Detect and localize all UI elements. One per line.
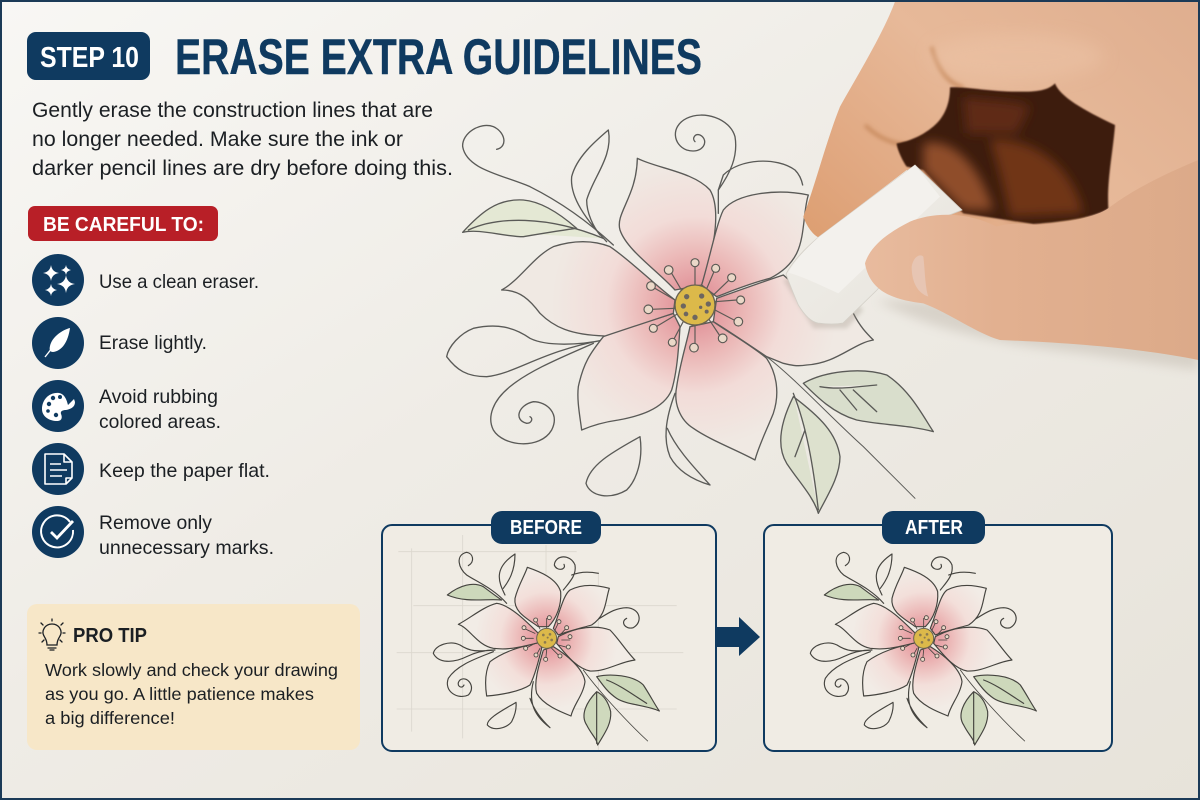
petal right bbox=[713, 275, 873, 366]
petal top bbox=[619, 158, 716, 290]
finger creases bbox=[865, 47, 963, 145]
intro paragraph: Gently erase the construction lines that are bbox=[32, 98, 433, 122]
step badge bbox=[27, 32, 150, 80]
title: ERASE EXTRA GUIDELINES bbox=[175, 29, 702, 85]
after label bbox=[882, 511, 985, 544]
checklist bbox=[32, 254, 274, 559]
flower sketch bbox=[433, 552, 659, 745]
bottom leaf bbox=[666, 393, 710, 485]
flower sketch bbox=[810, 552, 1036, 745]
lower left spiral bbox=[491, 343, 593, 444]
flower centre bbox=[675, 285, 715, 325]
thumb nail bbox=[912, 255, 928, 297]
curled fingers in shadow bbox=[923, 97, 1083, 217]
before label bbox=[491, 511, 601, 544]
eraser bbox=[786, 165, 962, 324]
top leaf bbox=[571, 130, 609, 242]
intro paragraph: darker pencil lines are dry before doing this. bbox=[32, 156, 453, 180]
before panel bbox=[382, 511, 716, 751]
item: avoid colored areas: colored areas. bbox=[99, 411, 221, 433]
item: erase lightly: Erase lightly. bbox=[99, 332, 207, 354]
lower left loop bbox=[447, 326, 603, 377]
be careful badge: BE CAREFUL TO: bbox=[43, 214, 204, 236]
pro tip panel: as you go. A little patience makes bbox=[45, 684, 314, 704]
top right swirl bbox=[675, 115, 736, 190]
right leaf bbox=[803, 371, 933, 432]
item: remove marks bbox=[32, 506, 274, 559]
pro tip panel: Work slowly and check your drawing bbox=[45, 660, 338, 680]
pro tip panel: a big difference! bbox=[45, 708, 175, 728]
step badge: STEP 10 bbox=[40, 42, 139, 74]
eraser shadow bbox=[783, 267, 863, 328]
petal left bbox=[502, 242, 675, 336]
be careful badge bbox=[28, 206, 218, 241]
small upper right petal bbox=[718, 161, 803, 213]
after label: AFTER bbox=[905, 517, 963, 539]
item: clean eraser: Use a clean eraser. bbox=[99, 271, 259, 293]
intro paragraph: no longer needed. Make sure the ink or bbox=[32, 127, 403, 151]
item: avoid colored areas bbox=[32, 380, 221, 433]
eraser top face bbox=[788, 165, 940, 293]
lower right stem bbox=[767, 357, 915, 498]
fingers and back of hand bbox=[803, 2, 1198, 360]
petal bottom left bbox=[578, 313, 680, 430]
upper left spiral stem bbox=[463, 125, 613, 245]
hand shadow on paper bbox=[877, 300, 1198, 370]
icon: light bulb bbox=[39, 619, 65, 650]
item: remove marks: unnecessary marks. bbox=[99, 537, 274, 559]
thumb bbox=[865, 160, 1198, 360]
item: keep paper flat: Keep the paper flat. bbox=[99, 460, 270, 482]
dark gap inside hand bbox=[897, 83, 1115, 224]
pro tip panel: PRO TIP bbox=[73, 625, 147, 647]
item: remove marks: Remove only bbox=[99, 512, 212, 534]
item: clean eraser bbox=[32, 254, 259, 306]
construction guidelines bbox=[397, 535, 683, 750]
petal upper right bbox=[702, 192, 808, 297]
petal bottom right bbox=[676, 322, 777, 460]
intro paragraph bbox=[32, 98, 453, 180]
main flower drawing bbox=[447, 115, 933, 513]
item: keep paper flat bbox=[32, 443, 270, 495]
stamens bbox=[644, 259, 745, 352]
after panel bbox=[764, 511, 1112, 751]
pro tip panel bbox=[27, 604, 360, 750]
lower leaf bbox=[781, 393, 840, 513]
bottom teardrop bbox=[586, 437, 641, 496]
item: avoid colored areas: Avoid rubbing bbox=[99, 386, 218, 408]
arrow bbox=[716, 617, 760, 656]
palm highlight bbox=[930, 33, 1103, 80]
item: erase lightly bbox=[32, 317, 207, 369]
left leaf bbox=[463, 200, 603, 238]
centre seeds bbox=[681, 293, 711, 320]
hand holding eraser bbox=[783, 2, 1198, 370]
before label: BEFORE bbox=[510, 517, 582, 539]
